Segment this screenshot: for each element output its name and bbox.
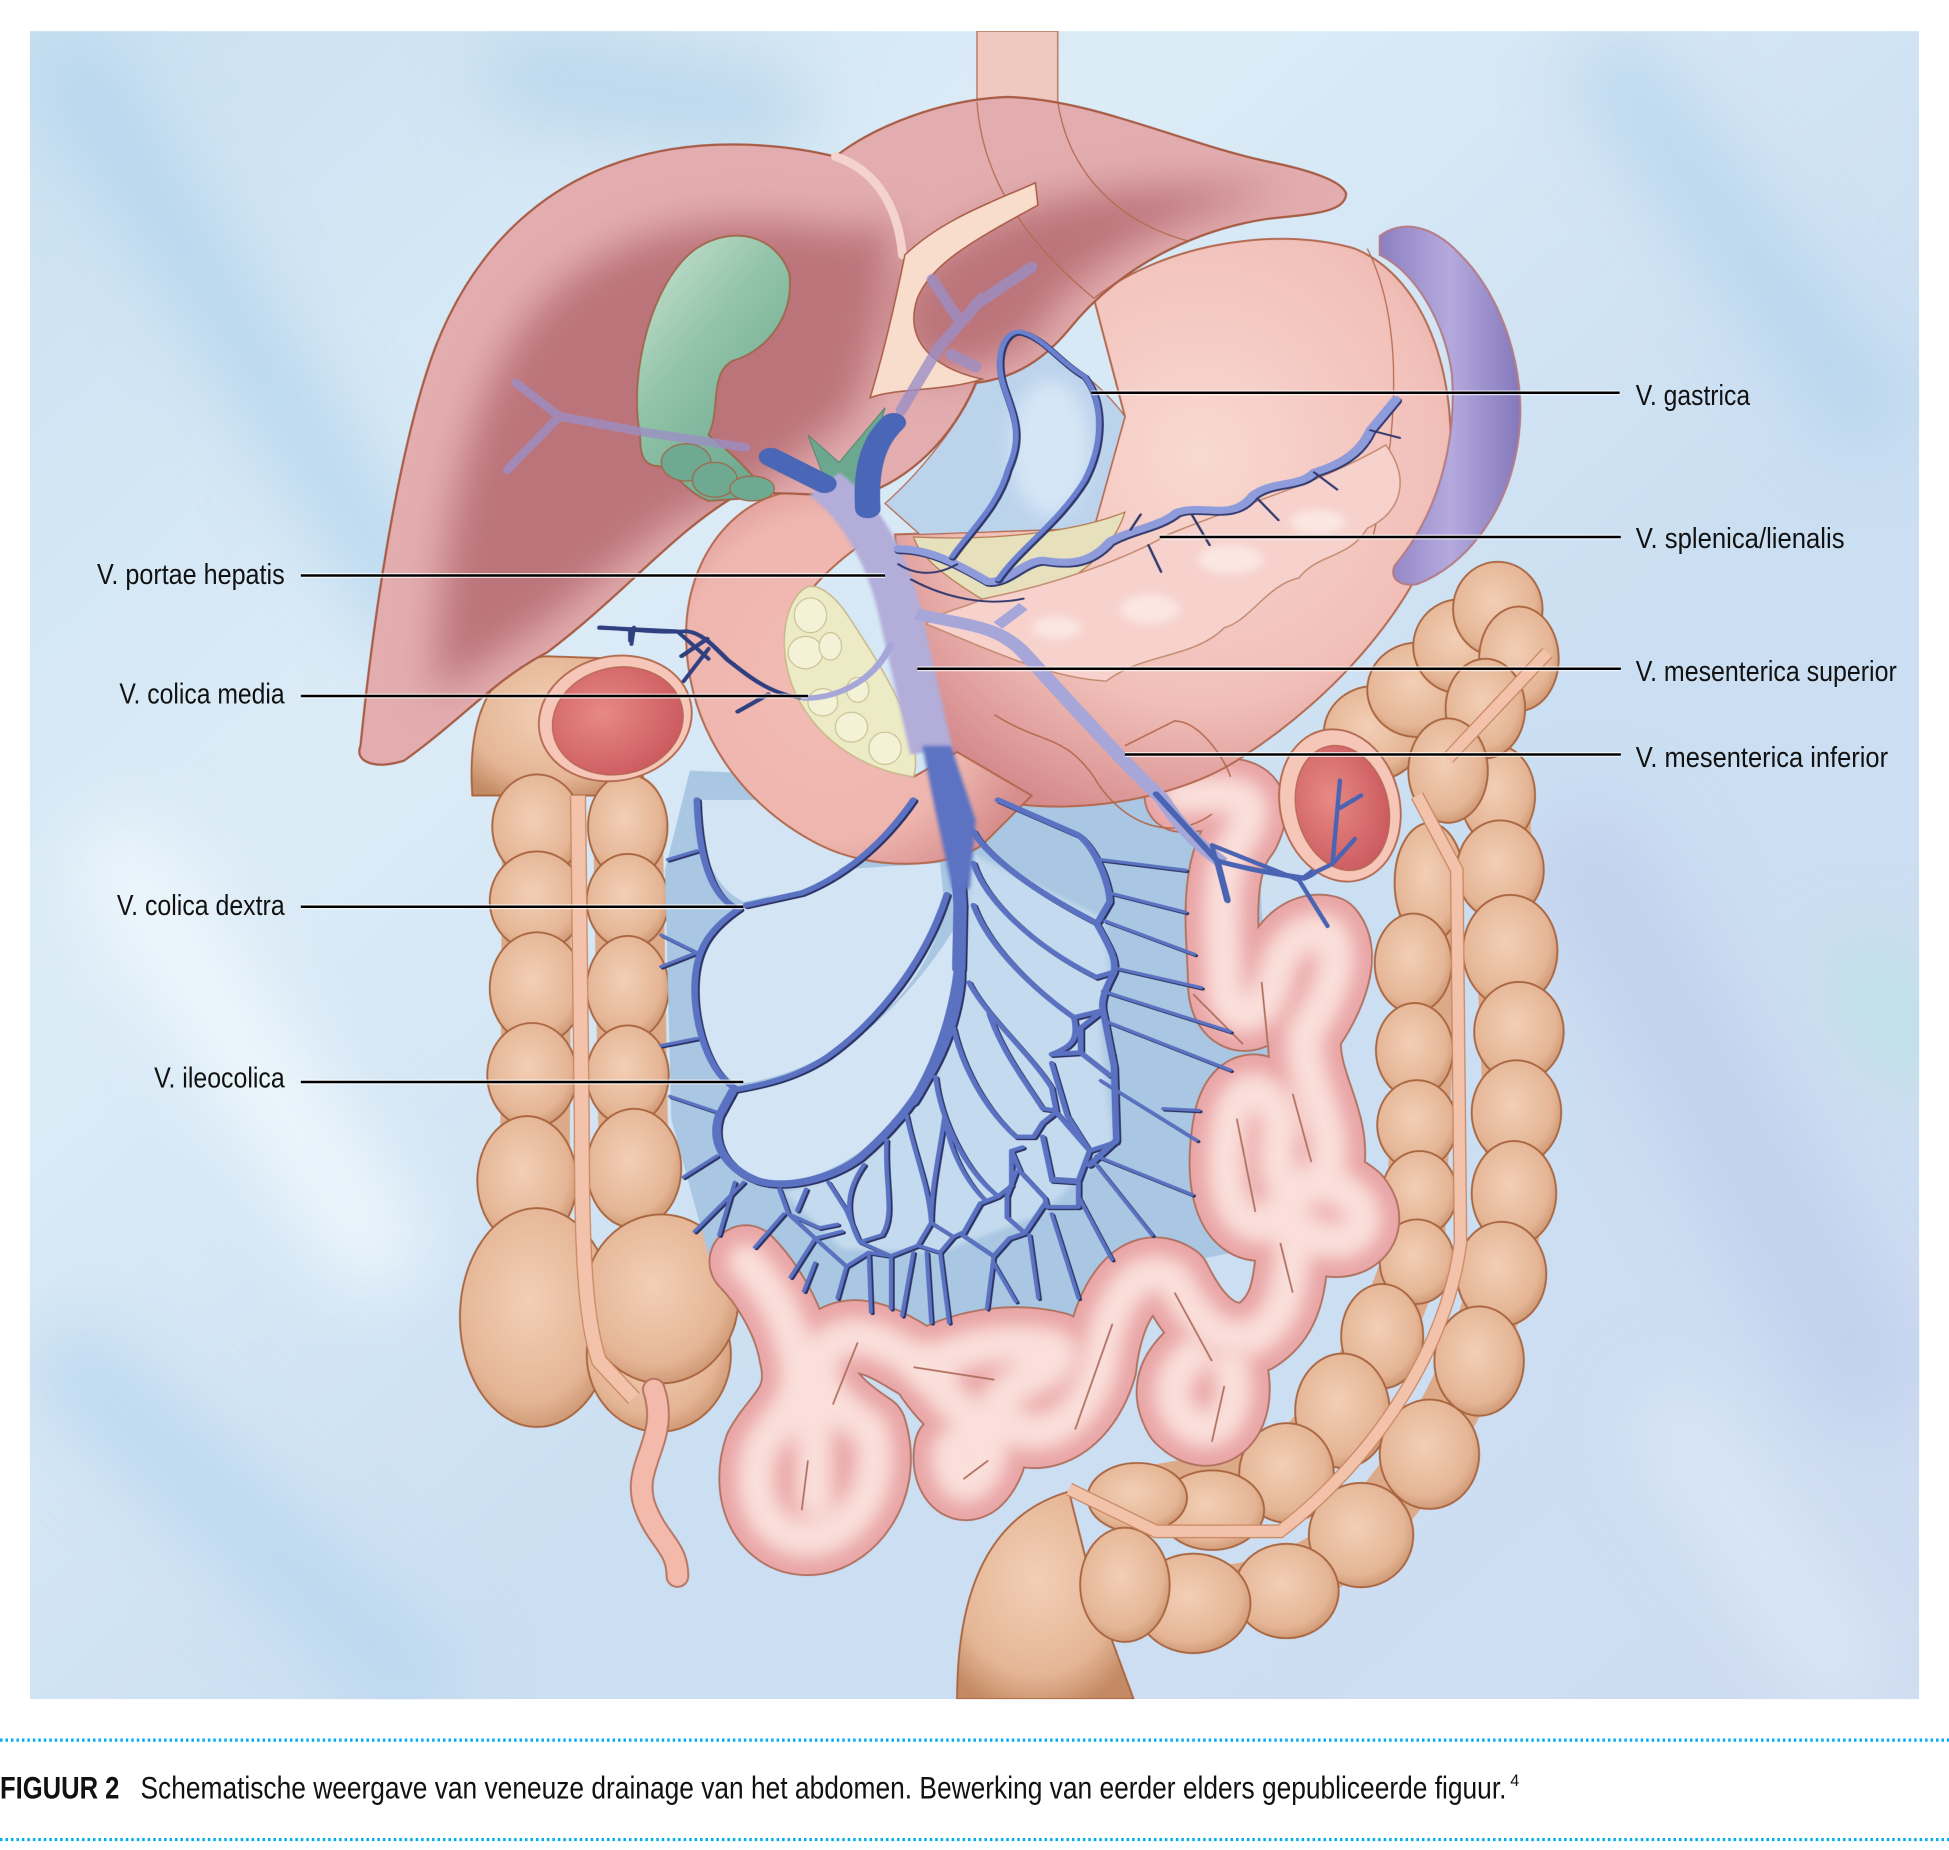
labels right	[917, 380, 1897, 774]
v. portae hepatis	[824, 484, 932, 752]
label: v. gastrica: V. gastrica	[1636, 380, 1750, 412]
stomach fundus line	[1367, 249, 1394, 534]
v. colica media twigs over left colon	[599, 628, 709, 681]
ascending colon backing	[534, 808, 634, 1243]
pancreas mottling	[1032, 510, 1345, 639]
descending colon inner column	[1088, 823, 1464, 1550]
appendix	[642, 1390, 677, 1576]
duodenum	[686, 491, 1032, 864]
colon taenia strip right	[1069, 653, 1547, 1531]
omentum highlight	[1011, 379, 1090, 516]
esophagus	[977, 31, 1058, 286]
superior mesenteric trunk	[922, 746, 976, 889]
mesentery backdrop	[665, 771, 1280, 1336]
branch to splenic junction	[998, 606, 1023, 625]
rectum	[957, 1492, 1134, 1699]
vein stub left	[771, 457, 824, 484]
pancreas tail cream section	[914, 512, 1125, 601]
label: v. colica dextra: V. colica dextra	[117, 890, 285, 922]
label: v. splenica/lienalis: V. splenica/lienalis	[1636, 523, 1845, 555]
vein on right colon opening	[1212, 781, 1361, 926]
veins inside liver	[507, 267, 1032, 470]
v. gastrica	[952, 332, 1100, 581]
pancreas head lobules	[788, 598, 901, 764]
colon taenia strip left	[578, 795, 634, 1398]
portal vein system and upper tributaries	[600, 332, 1400, 900]
vein stub right	[867, 423, 893, 509]
esophagus and stomach seen through liver	[977, 102, 1318, 298]
labels left	[97, 559, 885, 1095]
cystic and hepatic duct	[808, 408, 885, 491]
label: v. ileocolica: V. ileocolica	[154, 1063, 285, 1095]
transverse colon right remnant	[1324, 562, 1559, 823]
descending and sigmoid colon	[957, 562, 1564, 1699]
caption label: FIGUUR 2	[0, 1771, 119, 1806]
falciform ligament	[870, 183, 1038, 398]
gallbladder	[637, 236, 790, 501]
colon taenia strip left fill	[578, 795, 634, 1398]
liver	[359, 97, 1346, 765]
v. splenica	[898, 400, 1400, 602]
descending colon backing	[1125, 615, 1516, 1597]
caption reference: 4	[1510, 1772, 1519, 1790]
jejunal flexure outline	[994, 715, 1231, 828]
gallbladder neck lobes	[661, 444, 774, 501]
left colon opening	[527, 642, 704, 795]
v. mesenterica inferior lower	[1156, 775, 1350, 900]
label: v. portae hepatis: V. portae hepatis	[97, 559, 285, 591]
spleen	[1380, 227, 1520, 585]
appendix outline	[642, 1390, 677, 1576]
right colon opening	[1212, 716, 1416, 926]
ascending colon	[460, 656, 738, 1432]
caption text: Schematische weergave van veneuze drainage van het abdomen. Bewerking van eerder elders gepubliceerde figuur.	[140, 1771, 1506, 1806]
colon taenia strip right edge	[1069, 653, 1547, 1531]
ascending colon outer haustra	[460, 656, 646, 1427]
label: v. colica media: V. colica media	[119, 679, 285, 711]
mesenteric venous tree	[661, 800, 1232, 1324]
descending colon outer column	[1080, 746, 1564, 1653]
v. colica media	[600, 627, 891, 712]
caption block	[0, 1740, 1949, 1840]
stomach	[895, 239, 1451, 807]
v. mesenterica inferior upper	[916, 614, 1222, 863]
liver fold highlight	[835, 157, 902, 255]
label: v. mesenterica superior: V. mesenterica superior	[1636, 656, 1897, 688]
pancreas body	[926, 445, 1400, 681]
label: v. mesenterica inferior: V. mesenterica inferior	[1636, 742, 1888, 774]
lesser omentum window	[885, 329, 1125, 534]
ascending colon inner haustra	[584, 774, 738, 1432]
small intestine	[746, 794, 1363, 1539]
pancreas head	[784, 586, 916, 777]
small intestine fold lines	[802, 982, 1311, 1510]
